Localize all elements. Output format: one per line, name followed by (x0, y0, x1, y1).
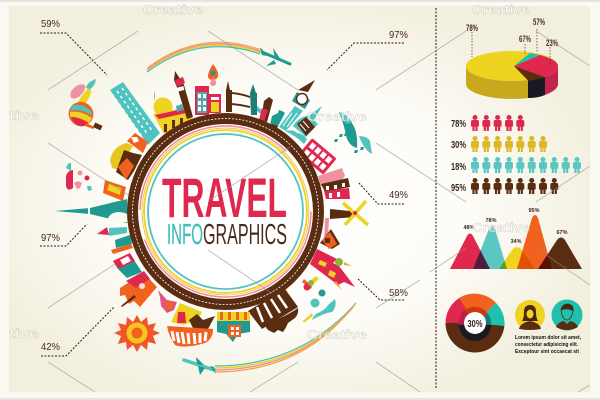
callout 42%: 42% (41, 341, 60, 353)
balloon and clouds (65, 79, 102, 130)
3D pie chart (466, 17, 558, 99)
callout 42% (41, 307, 114, 356)
callout 97% left: 97% (41, 232, 60, 244)
windmill (330, 201, 368, 225)
right houses (318, 168, 350, 199)
lorem text: Exceptour sint occaecat sit (515, 349, 579, 355)
watermark text: tive (9, 108, 39, 123)
rainbow arc top with plane (147, 42, 290, 72)
leaning tower (110, 82, 160, 145)
pink tiny tower (324, 218, 329, 240)
donut chart (445, 294, 505, 352)
donut chart: 30% (468, 319, 483, 330)
orange house (320, 229, 340, 249)
sun (114, 315, 160, 352)
pictogram row 95% (451, 178, 558, 194)
pictogram row 78%: 78% (451, 119, 466, 130)
big ben (279, 80, 315, 131)
central ring emblem (132, 118, 318, 304)
pie labels: 23% (546, 38, 558, 48)
pie labels: 57% (533, 17, 545, 27)
callout 97% left (40, 224, 87, 246)
pie labels (466, 17, 558, 66)
mountain labels: 67% (556, 230, 568, 236)
avatar man (552, 300, 582, 330)
callout 58%: 58% (389, 287, 408, 299)
callout 59%: 59% (41, 18, 60, 30)
colorful shops (195, 86, 221, 115)
watermark text: Creative (307, 109, 367, 124)
watermark text: Creative (472, 220, 530, 235)
double decker bus (299, 138, 337, 175)
pie labels: 78% (466, 23, 478, 33)
mountain labels: 95% (528, 208, 540, 214)
pictogram row 30%: 30% (451, 140, 466, 151)
mountain chart (450, 208, 582, 269)
callout 49% (358, 182, 408, 204)
venice tower (174, 71, 193, 119)
flame and drop (208, 64, 218, 86)
butterfly (158, 290, 177, 313)
watermark text: Creative (143, 2, 203, 17)
title: GRAPHICS (203, 219, 287, 251)
callout 97% top: 97% (389, 29, 408, 41)
pie labels: 67% (519, 34, 531, 44)
mountain labels: 48% (463, 225, 475, 231)
mountain labels (463, 208, 568, 245)
lower left houses (97, 227, 157, 307)
lorem text: Lorem ipsum dolor sit amet, (515, 335, 581, 341)
title: TRAVEL (162, 166, 287, 229)
colosseum and houses upper left (103, 133, 148, 201)
teal domed church (285, 106, 322, 144)
pictogram row 95%: 95% (451, 183, 466, 194)
rain clouds (334, 112, 372, 154)
callout 59% (40, 18, 107, 75)
vertical divider (435, 8, 437, 388)
lorem text (515, 335, 581, 355)
avatar woman (515, 300, 545, 330)
callout 49%: 49% (389, 189, 408, 201)
eiffel tower (55, 199, 127, 223)
title (162, 166, 287, 251)
watermark text (9, 2, 530, 342)
mountain labels: 34% (510, 239, 522, 245)
pictogram row 30% (451, 136, 547, 152)
canal building (217, 312, 250, 342)
callout 97% top (327, 29, 408, 70)
domed building (153, 90, 193, 134)
gondola (167, 303, 215, 347)
tower bridge (226, 81, 285, 132)
hearts cluster (66, 163, 92, 191)
watermark text: Creative (307, 327, 367, 342)
red castle (310, 249, 355, 290)
bridge pier (248, 289, 298, 333)
title: INFO (167, 219, 203, 251)
snowflakes and teal cloud (302, 290, 336, 322)
tulips and bits (302, 276, 319, 290)
pictogram row 18%: 18% (451, 162, 466, 173)
callout 58% (358, 279, 408, 300)
watermark text: Creative (472, 2, 530, 17)
rainbow arc bottom with plane (184, 303, 356, 375)
watermark text: tive (9, 326, 39, 341)
mountain labels: 78% (485, 218, 497, 224)
pictogram row 18% (451, 157, 581, 173)
lorem text: consectetur adipisicing elit. (515, 342, 578, 348)
pictogram row 78% (451, 115, 524, 131)
